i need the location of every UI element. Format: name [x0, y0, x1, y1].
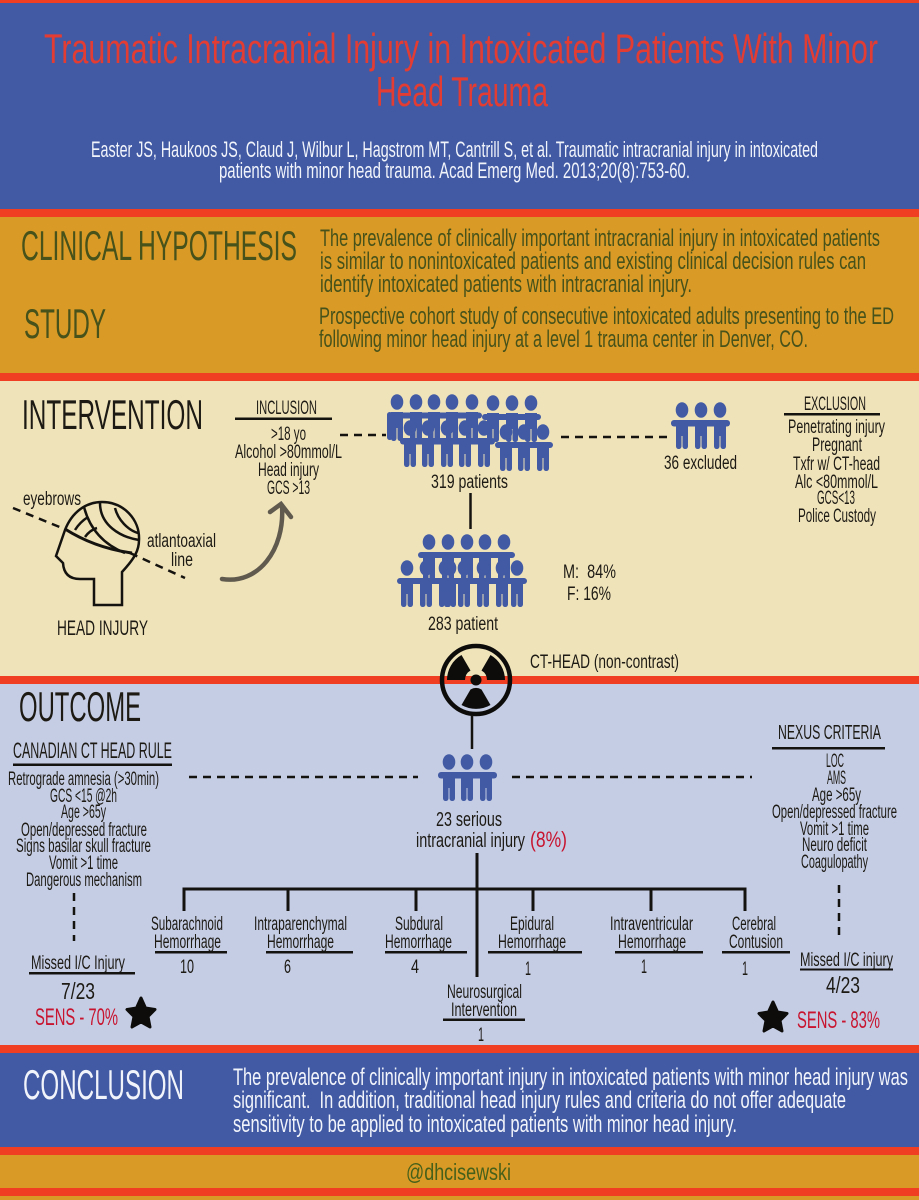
icon: 283 patients crowd [397, 534, 527, 607]
breakdown: cerebral contusion: Contusion [729, 932, 783, 953]
result: nexus: 4/23 [826, 972, 860, 998]
panel: conclusion [23, 1061, 908, 1138]
nexus criteria list [772, 722, 897, 873]
canadian CT head rule list: Retrograde amnesia (>30min) [8, 769, 159, 790]
breakdown: cerebral contusion: Cerebral [732, 914, 776, 935]
label: 23 serious intracranial injury: intracranial injury [416, 830, 525, 852]
sex split [563, 562, 616, 605]
breakdown: intraventricular [610, 914, 703, 978]
nexus criteria list: Age >65y [812, 785, 861, 806]
footer handle: @dhcisewski [406, 1159, 511, 1185]
breakdown: subdural [385, 914, 467, 978]
hypothesis text [320, 225, 880, 298]
icon: 36 excluded group [671, 402, 730, 449]
inclusion list [235, 398, 342, 499]
title [44, 25, 878, 115]
icon: radiation symbol [442, 646, 510, 714]
breakdown: subarachnoid: Subarachnoid [151, 914, 223, 935]
result: nexus [797, 950, 893, 1034]
breakdown: epidural [488, 914, 582, 980]
canadian CT head rule list: Signs basilar skull fracture [16, 836, 151, 857]
breakdown: subdural: 4 [411, 957, 419, 978]
label: 23 serious intracranial injury: 23 serious [436, 809, 502, 831]
exclusion list: EXCLUSION [804, 394, 866, 415]
canadian CT head rule list: Vomit >1 time [49, 853, 118, 874]
connector: inclusion to patients [340, 434, 386, 436]
result: canadian rule: 7/23 [61, 978, 95, 1004]
citation: patients with minor head trauma. Acad Emerg Med. 2013;20(8):753-60. [219, 158, 690, 183]
breakdown: neurosurgical intervention: Neurosurgical [447, 982, 522, 1003]
nexus criteria list: LOC [826, 751, 844, 772]
result: canadian rule: SENS - 70% [35, 1004, 118, 1031]
exclusion list: Pregnant [812, 435, 862, 456]
icon: star right [759, 1002, 787, 1031]
label: 283 patient: 283 patient [428, 614, 499, 635]
icon: 319 patients crowd [387, 394, 553, 471]
breakdown: neurosurgical intervention: Intervention [451, 1000, 517, 1021]
tree connector lines [184, 853, 745, 977]
connector: patients to excluded [561, 436, 668, 438]
inclusion list: Alcohol >80mmol/L [235, 442, 342, 463]
breakdown: intraparenchymal: 6 [284, 957, 291, 978]
breakdown: neurosurgical intervention [443, 982, 525, 1046]
canadian CT head rule list: GCS <15 @2h [50, 786, 117, 807]
arrow: head injury to inclusion [222, 504, 291, 580]
conclusion text [233, 1064, 908, 1138]
breakdown: neurosurgical intervention: 1 [478, 1025, 484, 1046]
canadian CT head rule list: Age >65y [61, 802, 106, 823]
label: CT head: CT-HEAD (non-contrast) [530, 652, 679, 673]
icon: 23 serious group [438, 754, 497, 801]
panel: outcome [8, 683, 897, 1046]
breakdown: subdural: Hemorrhage [385, 932, 452, 953]
label: 23 serious intracranial injury: (8%) [530, 827, 567, 852]
canadian CT head rule list: CANADIAN CT HEAD RULE [13, 738, 172, 763]
breakdown: epidural: Epidural [510, 914, 554, 935]
label: 23 serious intracranial injury [416, 809, 567, 852]
study text [319, 303, 894, 353]
breakdown: epidural: Hemorrhage [498, 932, 566, 953]
canadian CT head rule list: Open/depressed fracture [21, 820, 147, 841]
title: Head Trauma [376, 68, 548, 115]
icon: bandaged head [13, 502, 185, 605]
heading: intervention: INTERVENTION [22, 391, 203, 438]
inclusion list: GCS >13 [267, 478, 310, 499]
canadian CT head rule list: Dangerous mechanism [26, 870, 142, 891]
nexus criteria list: AMS [827, 768, 846, 789]
inclusion list: INCLUSION [256, 398, 317, 419]
breakdown: epidural: 1 [525, 959, 531, 980]
label: eyebrows: eyebrows [23, 489, 81, 510]
breakdown: cerebral contusion: 1 [742, 959, 748, 980]
label: 36 excluded: 36 excluded [664, 453, 737, 474]
panel: title header [44, 25, 878, 183]
heading: study: STUDY [24, 300, 106, 347]
connector: canadian rule to missed [73, 893, 75, 941]
breakdown: subarachnoid: 10 [180, 957, 194, 978]
exclusion list: GCS<13 [817, 488, 855, 509]
nexus criteria list: Neuro deficit [802, 835, 867, 856]
icon: star left [127, 998, 155, 1027]
canadian CT head rule list [8, 738, 172, 891]
label: head injury: HEAD INJURY [57, 617, 148, 640]
connector: serious injury to nexus [512, 776, 752, 778]
breakdown: intraparenchymal: Intraparenchymal [254, 914, 347, 935]
connector: 319 to 283 [469, 493, 472, 529]
breakdown: intraparenchymal: Hemorrhage [267, 932, 334, 953]
label: atlantoaxial line: line [171, 550, 193, 571]
heading: conclusion: CONCLUSION [23, 1061, 184, 1108]
nexus criteria list: Coagulopathy [801, 852, 868, 873]
label: atlantoaxial line [147, 531, 216, 571]
label: atlantoaxial line: atlantoaxial [147, 531, 216, 552]
breakdown: intraventricular: 1 [641, 957, 647, 978]
breakdown: intraventricular: Hemorrhage [618, 932, 686, 953]
breakdown: cerebral contusion [722, 914, 790, 980]
breakdown: subarachnoid [151, 914, 227, 978]
hypothesis text: identify intoxicated patients with intracranial injury. [320, 271, 692, 298]
inclusion list: >18 yo [271, 424, 306, 445]
breakdown: intraparenchymal [254, 914, 353, 978]
panel: hypothesis and study [21, 222, 894, 353]
panel: intervention [13, 391, 885, 673]
sex split: F: 16% [567, 584, 611, 605]
heading: outcome: OUTCOME [19, 683, 141, 730]
label: 319 patients: 319 patients [431, 472, 508, 493]
result: canadian rule: Missed I/C Injury [31, 953, 125, 974]
connector: canadian rule to serious injury [189, 776, 418, 778]
result: canadian rule [29, 953, 135, 1031]
connector: radiation to serious injury [471, 715, 473, 749]
breakdown: subarachnoid: Hemorrhage [154, 932, 221, 953]
nexus criteria list: Vomit >1 time [800, 819, 869, 840]
citation [91, 137, 818, 183]
exclusion list [784, 394, 885, 527]
breakdown: intraventricular: Intraventricular [610, 914, 693, 935]
exclusion list: Alc <80mmol/L [795, 472, 878, 493]
heading: clinical hypothesis: CLINICAL HYPOTHESIS [21, 222, 297, 269]
sex split: M: 84% [563, 562, 616, 583]
inclusion list: Head injury [258, 460, 319, 481]
breakdown: subdural: Subdural [395, 914, 443, 935]
connector: nexus to missed [838, 885, 840, 938]
